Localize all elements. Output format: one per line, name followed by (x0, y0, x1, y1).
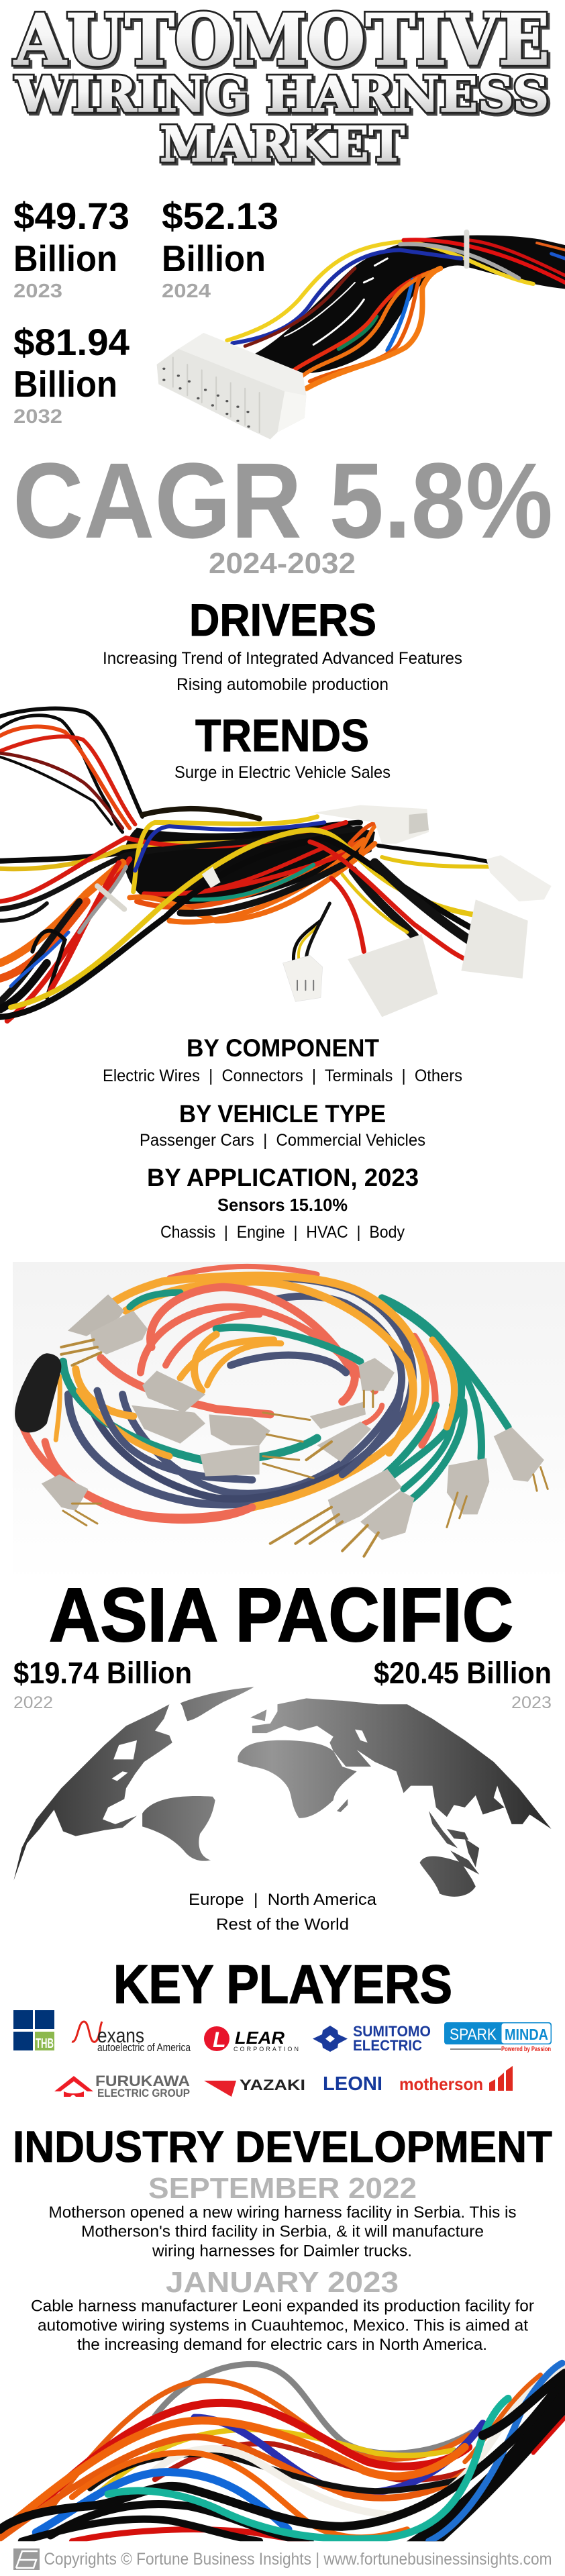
stat: 2024 market size (162, 195, 278, 302)
image: tangled wire harness (0, 709, 552, 1071)
stat: 2032 market size: 2032 (13, 406, 62, 428)
title: MARKET (160, 115, 405, 172)
map: eurasia (252, 1698, 552, 1829)
stat: 2024 market size: 2024 (162, 281, 211, 302)
segment: by application (147, 1164, 419, 1242)
map: madagascar (337, 1799, 348, 1812)
development: January 2023: the increasing demand for electric cars in North America. (77, 2336, 487, 2354)
logo: Spark Minda: SPARK (450, 2026, 497, 2044)
map: south america (142, 1796, 215, 1861)
heading: trends: TRENDS (195, 710, 369, 761)
segment: by component: Electric Wires | Connectors | Terminals | Others (103, 1067, 462, 1085)
stat: 2023 market size (13, 195, 130, 302)
development: September 2022: Motherson's third facility in Serbia, & it will manufacture (81, 2223, 484, 2240)
map: southeast asia islands (429, 1811, 479, 1875)
segment: by application: BY APPLICATION, 2023 (147, 1164, 419, 1191)
title: WIRING HARNESS (15, 66, 549, 123)
drivers list: Increasing Trend of Integrated Advanced Features (103, 649, 462, 668)
heading: Asia Pacific: ASIA PACIFIC (49, 1573, 513, 1657)
logo: Spark Minda: Powered by Passion (501, 2046, 551, 2053)
development: January 2023: Cable harness manufacturer Leoni expanded its production facility for (31, 2297, 534, 2316)
map: great lakes (111, 1771, 128, 1781)
segment: by application: Chassis | Engine | HVAC | Body (160, 1223, 405, 1242)
drivers list (103, 649, 462, 694)
stat: 2023 market size: Billion (13, 238, 117, 279)
other regions: Rest of the World (216, 1916, 349, 1934)
stat: 2024 market size: $52.13 (162, 195, 278, 237)
logo: Spark Minda: MINDA (505, 2026, 548, 2043)
logo: Leoni: LEONI (323, 2073, 382, 2095)
stat: Asia Pacific 2023: $20.45 Billion (374, 1656, 552, 1690)
stat: Asia Pacific 2023 (374, 1656, 552, 1712)
development: January 2023: automotive wiring systems in Cuauhtemoc, Mexico. This is aimed at (38, 2317, 528, 2334)
logo: Nexans: autoelectric of America (97, 2041, 191, 2054)
logo: Sumitomo Electric: SUMITOMO (353, 2023, 431, 2040)
trend text: Surge in Electric Vehicle Sales (174, 763, 391, 782)
other regions: Europe | North America (189, 1891, 377, 1909)
title (13, 0, 550, 172)
development: September 2022: Motherson opened a new wiring harness facility in Serbia. This is (48, 2203, 516, 2222)
footer logo (13, 2548, 40, 2570)
logo: Sumitomo Electric: ELECTRIC (353, 2037, 422, 2054)
logo: Spark Minda (444, 2022, 552, 2053)
logo: Furukawa Electric (54, 2073, 190, 2099)
development: January 2023: JANUARY 2023 (166, 2266, 399, 2299)
logo: Yazaki (204, 2077, 305, 2097)
stat: Asia Pacific 2022: $19.74 Billion (13, 1656, 192, 1690)
segment: by vehicle type: BY VEHICLE TYPE (179, 1100, 386, 1128)
drivers list: Rising automobile production (176, 675, 389, 694)
heading: key players: KEY PLAYERS (113, 1954, 452, 2015)
logo: Lear: L (213, 2028, 226, 2052)
segment: by component (103, 1034, 462, 1085)
map: greenland (180, 1687, 254, 1721)
segment: by vehicle type (140, 1100, 425, 1150)
logo: Yazaki: YAZAKI (240, 2077, 305, 2093)
map: british isles (250, 1710, 266, 1721)
map: australia (420, 1856, 476, 1897)
stat: 2023 market size: 2023 (13, 281, 62, 302)
development: September 2022: SEPTEMBER 2022 (148, 2172, 417, 2205)
logo: Sumitomo Electric (313, 2023, 431, 2054)
map: north america (13, 1704, 172, 1881)
logo: Motherson: motherson (399, 2074, 483, 2094)
stat: Asia Pacific 2022: 2022 (13, 1693, 53, 1712)
title: WIRING HARNESS (15, 66, 549, 123)
segment: by component: BY COMPONENT (187, 1034, 379, 1062)
development: January 2023 (31, 2266, 534, 2354)
logo: THB (13, 2010, 54, 2051)
stat: 2032 market size (13, 321, 130, 428)
segment: by vehicle type: Passenger Cars | Commercial Vehicles (140, 1131, 425, 1150)
logo: THB: THB (36, 2036, 54, 2051)
CAGR figure: 2024-2032 (209, 547, 356, 580)
stat: 2023 market size: $49.73 (13, 195, 130, 237)
logo: Lear (204, 2026, 299, 2052)
cable strain relief (15, 1353, 61, 1432)
map: hudson bay (113, 1740, 137, 1759)
development: September 2022: wiring harnesses for Daimler trucks. (152, 2242, 412, 2261)
stat: 2032 market size: $81.94 (13, 321, 130, 363)
image: connector with wire bundle (157, 232, 565, 444)
image: coiled colored cables (13, 1262, 565, 1583)
logo: Nexans (72, 2022, 191, 2054)
title: MARKET (160, 115, 405, 172)
stat: 2032 market size: Billion (13, 363, 117, 405)
stat: Asia Pacific 2022 (13, 1656, 192, 1712)
logo: Motherson (399, 2066, 513, 2094)
map: caspian sea (355, 1730, 368, 1742)
logo: Lear: CORPORATION (234, 2046, 299, 2052)
heading: drivers: DRIVERS (189, 595, 376, 646)
other regions (189, 1891, 377, 1934)
map: africa (238, 1740, 357, 1818)
logo: Furukawa Electric: FURUKAWA (95, 2073, 190, 2089)
development: September 2022 (48, 2172, 516, 2261)
logo: Lear: LEAR (235, 2028, 285, 2048)
stat: 2024 market size: Billion (162, 238, 266, 279)
image: wave of wires (0, 2363, 565, 2541)
logo: Nexans: exans (97, 2024, 144, 2047)
logo: Furukawa Electric: ELECTRIC GROUP (97, 2087, 190, 2099)
stat: Asia Pacific 2023: 2023 (511, 1693, 552, 1712)
world map (13, 1687, 552, 1897)
cable connectors (42, 1294, 548, 1556)
segment: by application: Sensors 15.10% (217, 1195, 348, 1215)
